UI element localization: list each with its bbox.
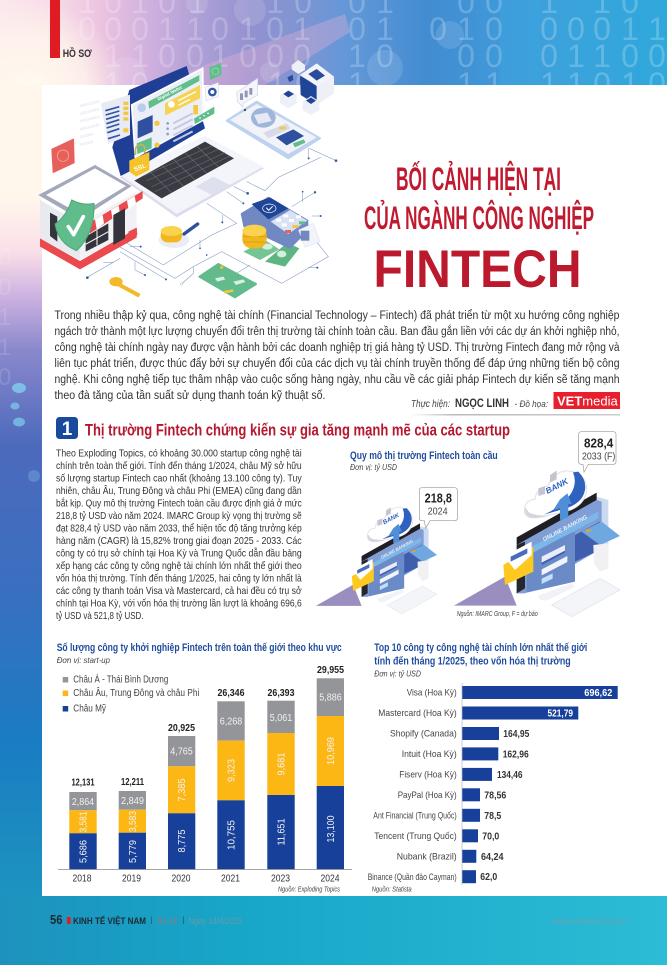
body text column: vốn hóa thị trường. Tính đến tháng 1/2025, hai công ty lớn nhất là bbox=[56, 572, 302, 584]
bar: 2024: 10,969 bbox=[326, 737, 337, 765]
legend: Châu Á - Thái Bình Dương bbox=[73, 672, 168, 686]
issue date: Ngày 14/4/2025 bbox=[188, 916, 242, 927]
company labels: Visa (Hoa Kỳ) bbox=[407, 688, 457, 699]
panel: stacked bar chart of fintech startups by region bbox=[57, 642, 352, 894]
body text column: 218,8 tỷ USD vào năm 2024. IMARC Group kỳ vọng thị trường sẽ bbox=[56, 510, 302, 522]
body text column: chính trên toàn thế giới. Tính đến tháng 1/2024, châu Mỹ sở hữu bbox=[56, 460, 302, 472]
bar: 2024 bbox=[317, 665, 344, 869]
icon: large online banking monitor 2033: BANK bbox=[544, 476, 571, 496]
red app tile bbox=[52, 139, 74, 172]
bar values: 62,0 bbox=[480, 872, 498, 883]
legend: Châu Mỹ bbox=[73, 704, 106, 715]
title keyword: FINTECH bbox=[374, 240, 582, 299]
body text column: nhiên, châu Âu, Trung Đông và châu Phi (EMEA) cũng đang dần bbox=[56, 484, 302, 497]
circuit lines bbox=[87, 148, 336, 284]
POS terminal bbox=[241, 197, 320, 249]
body text column: tỷ USD và 521,8 tỷ USD. bbox=[56, 610, 144, 622]
chart title: Top 10 công ty công nghệ tài chính lớn nhất thế giới bbox=[374, 642, 587, 654]
body text column: Theo Exploding Topics, có khoảng 30.000 startup công nghệ tài bbox=[56, 448, 302, 460]
bar: 2018: 2,864 bbox=[72, 797, 95, 808]
callout: 2024 value: 218,8 bbox=[425, 491, 452, 506]
title bbox=[364, 161, 594, 299]
x axis years bbox=[72, 874, 340, 885]
page number: 56 bbox=[50, 913, 63, 927]
laptop main window bbox=[132, 68, 203, 157]
cash bbox=[243, 240, 299, 267]
company labels: Mastercard (Hoa Kỳ) bbox=[378, 708, 457, 719]
icon: large online banking monitor 2033 bbox=[454, 471, 620, 617]
bar: 2021 bbox=[217, 688, 245, 869]
chart title: Số lượng công ty khởi nghiệp Fintech trên toàn thế giới theo khu vực bbox=[57, 642, 342, 654]
intro paragraph: theo đà tăng của tần suất sử dụng thanh toán kỹ thuật số. bbox=[54, 390, 326, 402]
section tag: Hồ sơ: HỒ SƠ bbox=[63, 47, 92, 60]
white content panel bbox=[42, 85, 667, 896]
bar: 2019: 2,849 bbox=[121, 796, 144, 807]
body text column bbox=[56, 448, 302, 622]
logo: VETmedia: VETmedia bbox=[557, 394, 618, 408]
bar: 2020: 4,765 bbox=[170, 746, 193, 758]
chart unit: Đơn vị: tỷ USD bbox=[350, 462, 397, 472]
bar: 2021: 26,346 bbox=[218, 688, 245, 699]
panel: market size pictorial chart bbox=[316, 432, 620, 618]
bar: 2024: 29,955 bbox=[317, 665, 344, 676]
green credit card bbox=[199, 264, 256, 297]
x axis years: 2023 bbox=[271, 874, 290, 885]
issue number: Số 15 bbox=[157, 916, 178, 927]
x axis years: 2018 bbox=[72, 874, 92, 885]
chart title: Quy mô thị trường Fintech toàn cầu bbox=[350, 450, 498, 462]
footer band background bbox=[0, 896, 667, 965]
bar: 2024: 13,100 bbox=[326, 815, 337, 842]
bar values: 134,46 bbox=[497, 770, 523, 781]
bar: 2018: 3,581 bbox=[78, 811, 90, 832]
coins with magnifier bbox=[159, 224, 198, 248]
chart title: tính đến tháng 1/2025, theo vốn hóa thị trường bbox=[374, 655, 571, 667]
bar values: 78,56 bbox=[484, 790, 507, 801]
bars bbox=[462, 686, 618, 883]
illustration: fintech isometric laptop, store, phone, POS bbox=[38, 60, 584, 590]
chart source: Nguồn: Statista bbox=[372, 885, 412, 894]
floating tiles bbox=[194, 107, 214, 124]
laptop deck bbox=[120, 136, 264, 217]
chart source: Nguồn: Exploding Topics bbox=[278, 885, 340, 894]
bar: 2018: 12,131 bbox=[72, 778, 95, 789]
publication name: KINH TẾ VIỆT NAM bbox=[73, 915, 146, 927]
section heading 1 bbox=[56, 417, 510, 440]
body text column: chính tại Hoa Kỳ, với vốn hóa thị trường lần lượt là khoảng 696,6 bbox=[56, 598, 302, 610]
bar: 2021: 10,755 bbox=[226, 820, 238, 850]
company labels bbox=[368, 688, 457, 883]
bar: 2023: 11,651 bbox=[276, 818, 288, 846]
company labels: Intuit (Hoa Kỳ) bbox=[402, 749, 457, 760]
body text column: đạt 828,4 tỷ USD vào năm 2033, thể hiện tốc độ tăng trưởng kép bbox=[56, 522, 302, 534]
bar: 2021: 6,268 bbox=[220, 716, 243, 728]
x axis years: 2020 bbox=[172, 874, 191, 885]
phone bbox=[227, 102, 320, 158]
intro paragraph: Trong nhiều thập kỷ qua, công nghệ tài chính (Financial Technology – Fintech) đã phát triển từ một xu hướng công nghiệp bbox=[54, 310, 620, 322]
x axis years: 2021 bbox=[221, 874, 240, 885]
bar values: 521,79 bbox=[548, 708, 573, 720]
laptop left window bbox=[101, 95, 130, 144]
bar: 2023: 26,393 bbox=[268, 688, 295, 699]
body text column: xếp hạng các công ty công nghệ tài chính lớn nhất thế giới theo bbox=[56, 560, 302, 572]
bar: 2020 bbox=[168, 723, 195, 869]
intro paragraph bbox=[54, 310, 620, 402]
bar: 2020: 20,925 bbox=[168, 723, 195, 734]
section tag: Hồ sơ bbox=[50, 0, 92, 60]
binary watermark bbox=[79, 100, 100, 147]
bars bbox=[69, 665, 344, 869]
illustration: fintech isometric laptop, store, phone, POS: Digital Wallet bbox=[157, 85, 183, 102]
bar values: 696,62 bbox=[584, 688, 613, 699]
binary watermark: 0001010100 bbox=[79, 100, 100, 108]
heading text: Thị trường Fintech chứng kiến sự gia tăng mạnh mẽ của các startup bbox=[85, 422, 510, 440]
body text column: công ty có trụ sở chính tại Hoa Kỳ và Trung Quốc dẫn đầu bảng bbox=[56, 546, 302, 560]
binary watermark: 1010101001 bbox=[79, 107, 100, 116]
bar values: 162,96 bbox=[503, 749, 529, 760]
chart unit: Đơn vị: start-up bbox=[57, 655, 110, 665]
company labels: Ant Financial (Trung Quốc) bbox=[373, 810, 457, 822]
bar: 2021: 9,323 bbox=[226, 759, 238, 782]
body text column: bắt kịp. Quy mô thị trường Fintech toàn cầu được định giá ở mức bbox=[56, 496, 302, 510]
bar: 2019: 12,211 bbox=[121, 777, 144, 788]
number badge: 1 bbox=[62, 419, 73, 440]
laptop screen bbox=[112, 66, 205, 176]
security shield bbox=[55, 200, 94, 251]
data cubes bbox=[317, 77, 334, 105]
bar: 2023 bbox=[267, 688, 295, 869]
chart title bbox=[374, 642, 587, 667]
chart source: Nguồn: IMARC Group, F = dự báo bbox=[457, 609, 538, 618]
x axis years: 2019 bbox=[122, 874, 141, 885]
company labels: Nubank (Brazil) bbox=[397, 851, 457, 862]
intro paragraph: nghệ. Khi công nghệ tiếp tục thâm nhập vào cuộc sống hàng ngày, nhu cầu về các giải pháp Fintech dự kiến sẽ tăng mạnh bbox=[54, 374, 620, 386]
bar: 2019: 3,583 bbox=[128, 811, 139, 832]
bar values: 70,0 bbox=[482, 831, 500, 842]
number badge bbox=[56, 417, 78, 440]
bar: 2020: 8,775 bbox=[177, 829, 188, 852]
intro paragraph: liên tục phát triển, được thúc đẩy bởi sự chuyển đổi của các dịch vụ tài chính truyền thống để đáp ứng những tiến bộ công bbox=[54, 358, 620, 370]
footer bbox=[50, 913, 628, 927]
key bbox=[109, 277, 141, 297]
coin stack bbox=[242, 225, 267, 248]
byline: - Đồ họa: bbox=[514, 399, 548, 409]
callout: 2024 value: 2024 bbox=[428, 506, 448, 517]
icon: small online banking monitor 2024: BANK bbox=[382, 512, 401, 526]
bar: 2019 bbox=[119, 777, 146, 869]
bar: 2019: 5,779 bbox=[128, 840, 139, 863]
bar values: 78,5 bbox=[484, 811, 502, 822]
chart unit: Đơn vị: tỷ USD bbox=[374, 669, 421, 679]
company labels: Binance (Quần đảo Cayman) bbox=[368, 872, 457, 883]
legend bbox=[63, 672, 199, 715]
callout: 2033 forecast value: 828,4 bbox=[584, 435, 614, 450]
callout: 2033 forecast value bbox=[579, 432, 616, 472]
page background: left strip with bubbles bbox=[0, 0, 42, 965]
bar: 2023: 5,061 bbox=[270, 713, 293, 724]
body text column: các công ty thanh toán Visa và Mastercard, cả hai đều có trụ sở bbox=[56, 585, 302, 597]
bar: 2018: 5,686 bbox=[78, 840, 90, 863]
company labels: Shopify (Canada) bbox=[390, 729, 457, 740]
storefront bbox=[38, 165, 143, 269]
panel: top 10 fintech companies horizontal bar chart bbox=[368, 642, 618, 894]
body text column: hàng năm (CAGR) là 15,82% trong giai đoạn 2025 - 2033. Các bbox=[56, 535, 302, 547]
icon: small online banking monitor 2024 bbox=[316, 507, 437, 614]
website: www.vneconomy.vn bbox=[550, 916, 628, 927]
callout: 2033 forecast value: 2033 (F) bbox=[582, 451, 615, 462]
header banner with binary digits: 0001101010101000011 bbox=[78, 11, 666, 47]
bar values bbox=[480, 688, 613, 883]
callout: 2024 value bbox=[419, 488, 457, 528]
byline: NGỌC LINH bbox=[455, 398, 509, 410]
binary watermark: 1010101 bbox=[79, 140, 94, 147]
byline bbox=[410, 392, 620, 416]
legend: Châu Âu, Trung Đông và châu Phi bbox=[73, 686, 199, 699]
icon: small online banking monitor 2024: ONLINE BANKING bbox=[380, 538, 414, 560]
bar: 2018 bbox=[69, 778, 97, 869]
bar values: 64,24 bbox=[481, 852, 504, 863]
binary watermark: 1010101 bbox=[79, 132, 94, 139]
bar: 2024: 5,886 bbox=[319, 692, 342, 704]
illustration: fintech isometric laptop, store, phone, POS: SSL bbox=[133, 162, 147, 174]
bar: 2020: 7,385 bbox=[177, 778, 188, 802]
header banner with binary digits bbox=[0, 0, 667, 102]
icon: large online banking monitor 2033: ONLINE BANKING bbox=[542, 514, 589, 543]
binary watermark: 0010101010 bbox=[79, 123, 100, 132]
company labels: Fiserv (Hoa Kỳ) bbox=[399, 770, 457, 781]
header banner with binary digits: 11001000100001100 bbox=[104, 38, 666, 74]
body text column: số lượng startup Fintech cao nhất (khoảng 13.100 công ty). Tuy bbox=[56, 472, 302, 484]
x axis years: 2024 bbox=[320, 874, 340, 885]
binary watermark: 1010100101 bbox=[79, 115, 100, 124]
company labels: Tencent (Trung Quốc) bbox=[374, 831, 457, 842]
header banner with binary digits: 1001011111010 bbox=[104, 66, 666, 102]
bar values: 164,95 bbox=[503, 729, 530, 740]
bar: 2023: 9,681 bbox=[276, 752, 288, 776]
SSL padlock bbox=[135, 145, 145, 155]
company labels: PayPal (Hoa Kỳ) bbox=[398, 790, 457, 801]
byline: Thực hiện: bbox=[411, 399, 450, 410]
